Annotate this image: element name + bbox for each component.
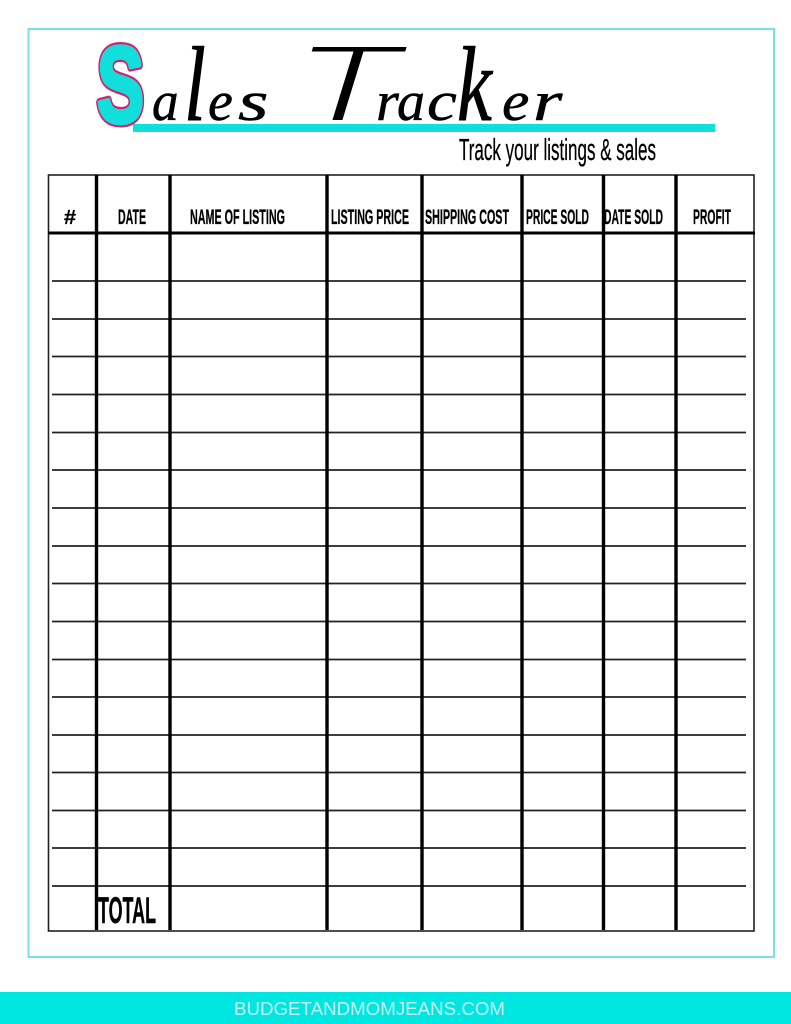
title initial S: S: [97, 24, 144, 145]
title word: racker: e: [502, 71, 529, 132]
column headers: NAME OF LISTING: [190, 206, 285, 229]
table outline: [48, 175, 754, 931]
table: TOTAL: [98, 890, 156, 931]
row lines: [52, 281, 746, 886]
column headers: DATE SOLD: [604, 206, 663, 229]
title word: racker: k: [457, 27, 493, 144]
column headers: DATE: [118, 206, 146, 229]
title word: racker: r: [533, 71, 564, 133]
column headers: SHIPPING COST: [425, 206, 509, 229]
footer band: [0, 992, 791, 1024]
title letter: T: T: [292, 21, 412, 146]
title word: racker: c: [427, 71, 457, 133]
title word: ales: [152, 27, 269, 144]
table: [48, 175, 755, 931]
column dividers: [95, 175, 678, 930]
footer url: BUDGETANDMOMJEANS.COM: [234, 999, 505, 1019]
title word: ales: l: [184, 27, 206, 144]
column headers: LISTING PRICE: [331, 206, 409, 229]
title initial S: [97, 24, 144, 145]
column headers: [64, 206, 731, 229]
title underline bar: [133, 124, 715, 132]
title word: ales: e: [208, 71, 233, 133]
table: PROFIT: [693, 206, 731, 229]
column headers: #: [64, 207, 76, 229]
title initial S: S: [97, 24, 144, 145]
header rule: [48, 232, 755, 234]
column headers: PRICE SOLD: [526, 206, 589, 229]
title word: racker: r: [376, 71, 400, 133]
title word: ales: s: [238, 70, 269, 132]
title word: racker: [376, 27, 564, 144]
title word: ales: a: [152, 70, 179, 132]
title word: racker: a: [397, 71, 425, 133]
title: [97, 21, 715, 146]
